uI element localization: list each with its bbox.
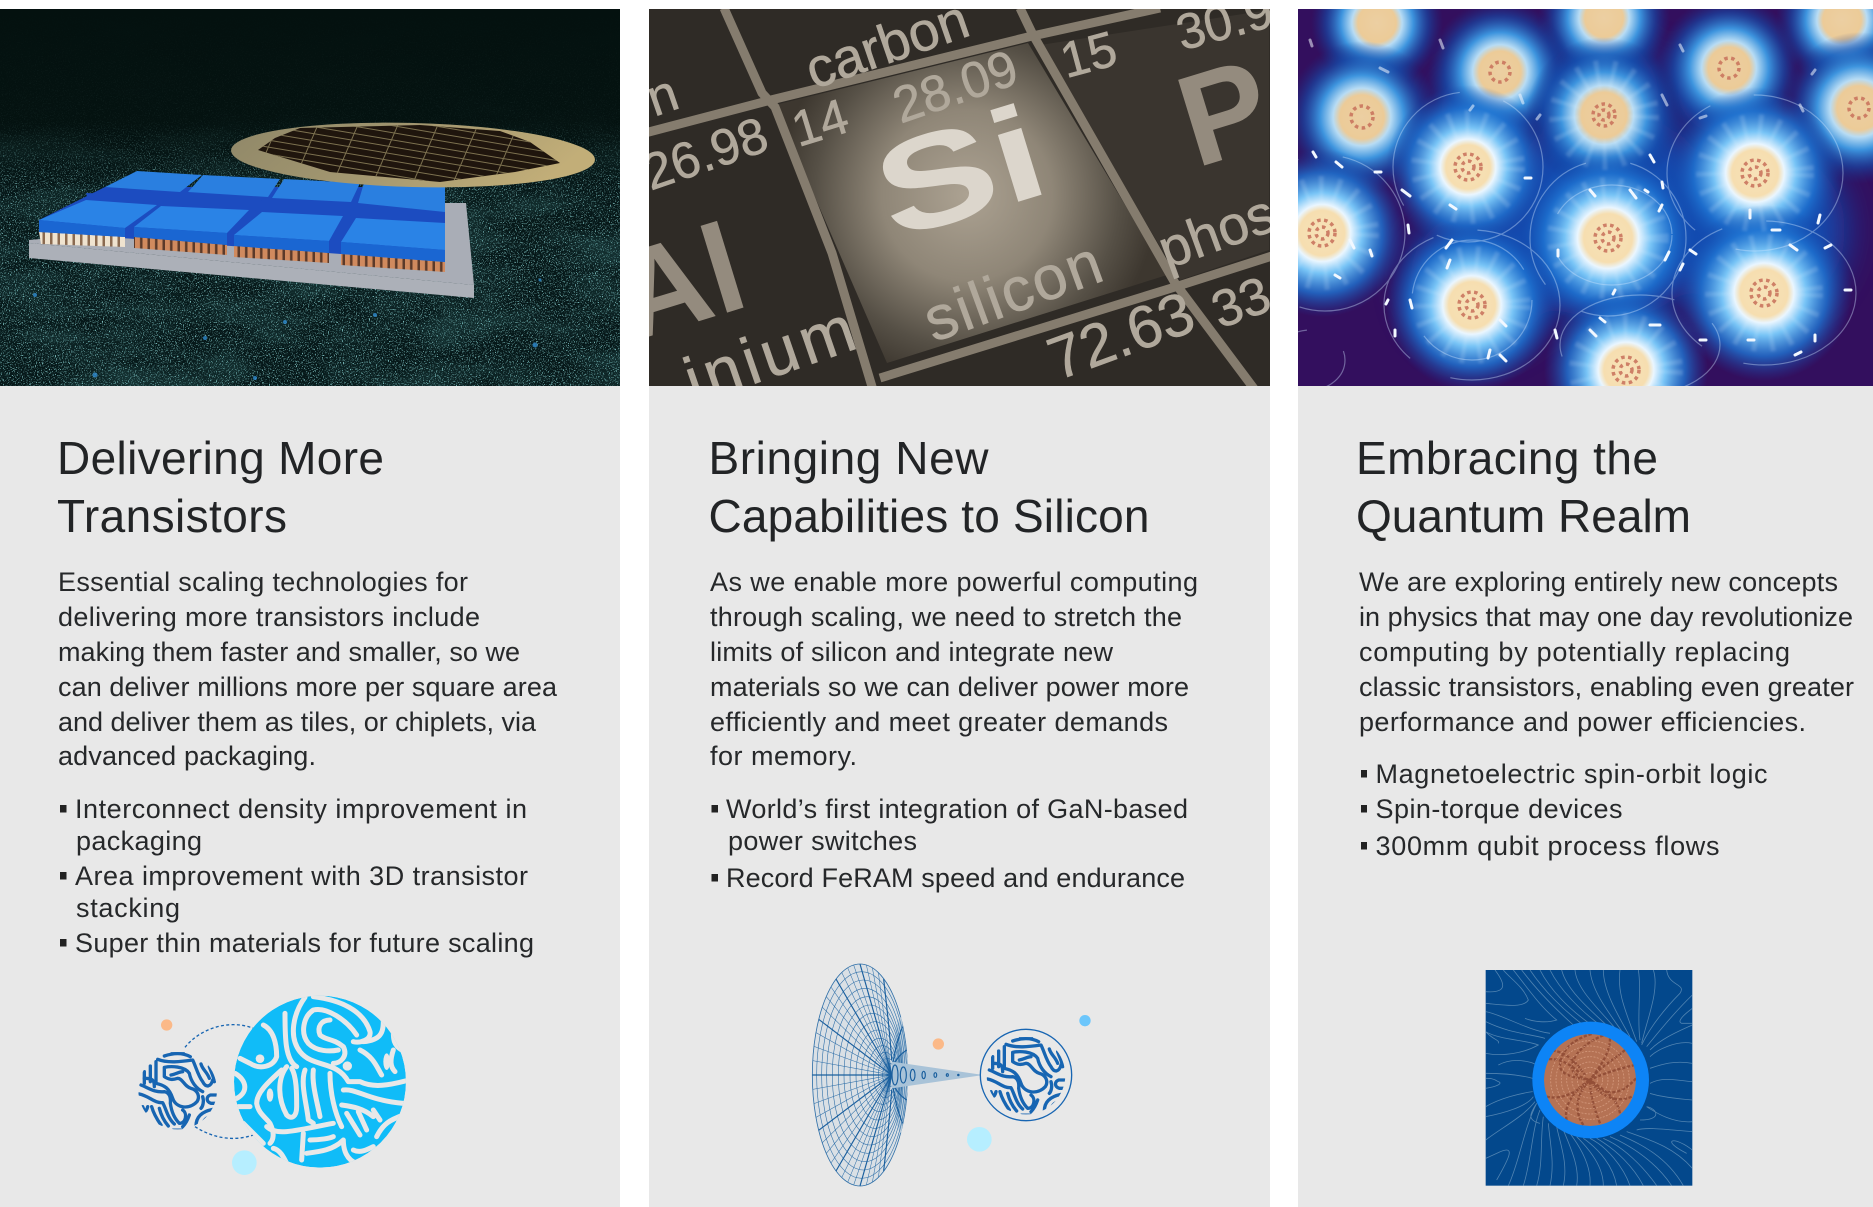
- photo: periodic table silicon: P: [1162, 30, 1287, 195]
- body text: [1359, 567, 1854, 737]
- bullet list: stacking: [76, 893, 180, 923]
- photo: periodic table silicon: 28.09: [886, 39, 1025, 134]
- panel: delivering more transistors: [0, 9, 620, 1207]
- photo: chiplets and wafer: [0, 9, 620, 386]
- photo: periodic table silicon: Si: [858, 77, 1062, 267]
- body text: can deliver millions more per square area: [58, 672, 558, 702]
- heading: Embracing the: [1356, 432, 1658, 484]
- body text: limits of silicon and integrate new: [710, 637, 1114, 667]
- photo: periodic table silicon: Al: [600, 198, 760, 367]
- heading: Capabilities to Silicon: [708, 490, 1150, 542]
- body text: and deliver them as tiles, or chiplets, via: [58, 707, 537, 737]
- bullet list: Spin-torque devices: [1376, 794, 1622, 824]
- photo: periodic table silicon: silicon: [915, 228, 1111, 356]
- heading: Quantum Realm: [1356, 490, 1691, 542]
- wafer: [231, 122, 595, 188]
- funnel stem: [892, 1062, 983, 1088]
- photo: periodic table silicon: inium: [675, 291, 864, 418]
- heading: Delivering More: [57, 432, 384, 484]
- body text: Essential scaling technologies for: [58, 567, 468, 597]
- photo: periodic table silicon: 15: [1054, 20, 1123, 89]
- illustration: magnetic field square: [1486, 970, 1692, 1186]
- blue square: [1486, 970, 1692, 1186]
- heading: [1356, 432, 1691, 542]
- bullet list: power switches: [728, 826, 917, 856]
- bullet list: Record FeRAM speed and endurance: [726, 863, 1185, 893]
- photo: periodic table silicon: 72.63: [1039, 279, 1203, 393]
- body text: computing by potentially replacing: [1359, 637, 1790, 667]
- body text: through scaling, we need to stretch the: [710, 602, 1182, 632]
- bullet list: 300mm qubit process flows: [1376, 831, 1720, 861]
- panel background 1: [0, 386, 620, 1207]
- blue stars: [33, 278, 542, 380]
- body text: As we enable more powerful computing: [710, 567, 1198, 597]
- illustration: scaling circles: [138, 996, 407, 1175]
- body text: advanced packaging.: [58, 741, 316, 771]
- body text: efficiently and meet greater demands: [710, 707, 1168, 737]
- bullet list: [712, 794, 1188, 893]
- orbits: [1298, 92, 1857, 386]
- small dot: orange: [161, 1019, 172, 1031]
- photo: periodic table silicon: 26.98: [636, 106, 775, 201]
- bullet list: Super thin materials for future scaling: [75, 928, 534, 958]
- field lines: [1486, 970, 1692, 1186]
- photo: periodic table silicon: 14: [785, 88, 855, 158]
- bullet list: [60, 794, 534, 958]
- body text: [58, 567, 558, 771]
- panel: bringing new capabilities to silicon: [649, 9, 1270, 1207]
- photo: periodic table silicon: n: [639, 64, 686, 128]
- body text: [710, 567, 1198, 771]
- bullet list: [1361, 759, 1768, 861]
- body text: delivering more transistors include: [58, 602, 480, 632]
- pale cyan dot: [967, 1127, 992, 1152]
- body text: making them faster and smaller, so we: [58, 637, 520, 667]
- funnel disk: [812, 964, 908, 1186]
- photo: glowing atoms: [1298, 9, 1873, 386]
- nuclei: [1309, 58, 1869, 383]
- photo: periodic table silicon: phos: [1150, 182, 1283, 281]
- body text: materials so we can deliver power more: [710, 672, 1189, 702]
- bullet list: Area improvement with 3D transistor: [75, 861, 528, 891]
- dashed arcs: [185, 1025, 255, 1138]
- rays: [1280, 75, 1808, 412]
- panel background 2: [649, 386, 1270, 1207]
- small labyrinth circle: [138, 1051, 217, 1129]
- heading: Bringing New: [708, 432, 989, 484]
- photo: periodic table silicon: 33: [1204, 266, 1278, 340]
- bullet list: Magnetoelectric spin-orbit logic: [1376, 759, 1768, 789]
- body text: for memory.: [710, 741, 857, 771]
- bullet list: World’s first integration of GaN-based: [726, 794, 1188, 824]
- bullet list: packaging: [76, 826, 202, 856]
- electrons: [1310, 40, 1851, 361]
- heading: [57, 432, 384, 542]
- big dot: pale cyan: [232, 1150, 257, 1175]
- body text: performance and power efficiencies.: [1359, 707, 1806, 737]
- orange dot: [933, 1038, 944, 1050]
- body text: We are exploring entirely new concepts: [1359, 567, 1838, 597]
- panel: embracing the quantum realm: [1298, 9, 1873, 1207]
- bullet list: Interconnect density improvement in: [75, 794, 527, 824]
- blue ring: [1532, 1022, 1649, 1138]
- illustration: funnel and labyrinth: [812, 964, 1091, 1186]
- labyrinth holes: [256, 1053, 390, 1102]
- large labyrinth circle: [233, 996, 407, 1168]
- blue dot: [1079, 1015, 1091, 1026]
- heading: [708, 432, 1150, 542]
- photo: periodic table silicon: [649, 9, 1270, 386]
- copper core: [1544, 1034, 1636, 1126]
- body text: in physics that may one day revolutionize: [1359, 602, 1853, 632]
- heading: Transistors: [57, 490, 287, 542]
- labyrinth circle: [980, 1029, 1072, 1121]
- body text: classic transistors, enabling even greater: [1359, 672, 1854, 702]
- panel background 3: [1298, 386, 1873, 1207]
